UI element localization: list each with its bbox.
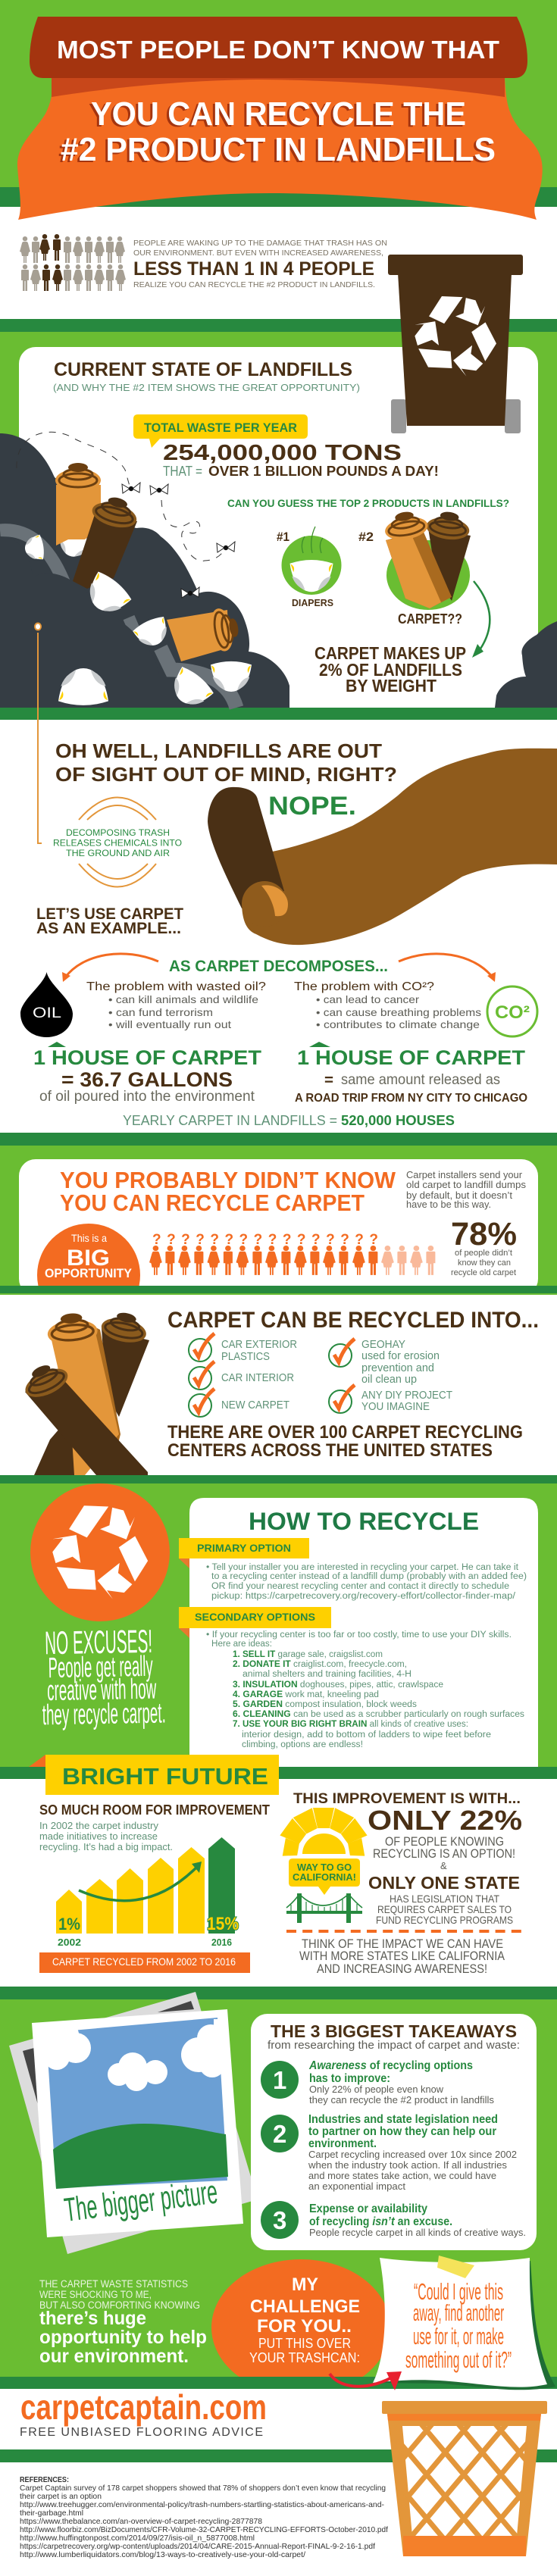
heading: from researching the impact of carpet and waste: <box>268 2040 520 2052</box>
awareness text block: OUR ENVIRONMENT. BUT EVEN WITH INCREASED AWARENESS, <box>133 249 383 258</box>
primary option text: to a recycling center instead of a landfill dump (probably with an added fee) <box>211 1572 527 1581</box>
secondary options list: interior design, add to bottom of ladders to wipe feet before <box>242 1730 491 1740</box>
top 2 products: CAN YOU GUESS THE TOP 2 PRODUCTS IN LANDFILLS? <box>227 497 509 509</box>
logo: carpetcaptain.com <box>20 2387 267 2439</box>
awareness text block: REALIZE YOU CAN RECYCLE THE #2 PRODUCT IN LANDFILLS. <box>133 280 375 289</box>
decomposing trash note <box>53 797 182 886</box>
references: http://www.lumberliquidators.com/blog/13-ways-to-creatively-use-your-old-carpet/ <box>20 2550 305 2559</box>
improvement stats: RECYCLING IS AN OPTION! <box>373 1846 515 1861</box>
bright future banner <box>29 1755 279 1795</box>
primary option text: • Tell your installer you are interested in recycling your carpet. He can take it <box>206 1563 519 1572</box>
check list: used for erosion <box>361 1349 440 1362</box>
wasted oil problems: • can fund terrorism <box>108 1006 213 1018</box>
no excuses note: NO EXCUSES! <box>45 1624 153 1662</box>
recycling centers statement <box>167 1422 523 1461</box>
total waste callout: THAT = <box>163 464 202 479</box>
current state of landfills heading: CURRENT STATE OF LANDFILLS <box>54 359 352 380</box>
title line 2: #2 PRODUCT IN LANDFILLS <box>61 131 496 168</box>
panel: you can recycle carpet <box>37 1171 526 1286</box>
total waste callout: TOTAL WASTE PER YEAR <box>144 420 297 435</box>
think of the impact: WITH MORE STATES LIKE CALIFORNIA <box>299 1949 505 1963</box>
carpet makes up 2 percent <box>314 643 466 696</box>
connector line <box>38 633 42 843</box>
decomposing trash note: RELEASES CHEMICALS INTO <box>53 838 182 849</box>
CO2 problems: • contributes to climate change <box>316 1018 480 1030</box>
as carpet decomposes, with arrows: AS CARPET DECOMPOSES... <box>169 957 388 975</box>
takeaway 2: 2 <box>273 2120 286 2148</box>
chart caption <box>39 1952 250 1973</box>
people pictogram: 78 percent: ???????????????? <box>152 1232 378 1248</box>
takeaway 1: has to improve: <box>309 2072 390 2085</box>
icon: diaper #1 <box>277 527 341 608</box>
think of the impact: AND INCREASING AWARENESS! <box>317 1962 487 1976</box>
total waste callout: OVER 1 BILLION POUNDS A DAY! <box>208 464 439 479</box>
total waste callout: 254,000,000 TONS <box>163 441 402 465</box>
room for improvement text: SO MUCH ROOM FOR IMPROVEMENT <box>39 1802 270 1818</box>
awareness text block: PEOPLE ARE WAKING UP TO THE DAMAGE THAT TRASH HAS ON <box>133 239 387 248</box>
illustration: crossed carpet rolls <box>18 1308 149 1475</box>
check list: ANY DIY PROJECT <box>361 1389 452 1402</box>
secondary options list: 4. GARAGE work mat, kneeling pad <box>233 1690 379 1699</box>
improvement stats <box>293 1791 522 1926</box>
takeaway 2: when the industry took action. If all industries <box>308 2159 507 2171</box>
challenge badge <box>211 2259 385 2377</box>
decomposing trash note: DECOMPOSING TRASH <box>66 827 170 838</box>
secondary options list: 1. SELL IT garage sale, craigslist.com <box>233 1650 383 1659</box>
stat: house equals road trip: A ROAD TRIP FROM NY CITY TO CHICAGO <box>295 1092 527 1105</box>
references: https://www.thebalance.com/an-overview-of-carpet-recycling-2877878 <box>20 2517 262 2526</box>
challenge badge: FOR YOU.. <box>257 2316 352 2337</box>
icon: orange recycle circle <box>30 1483 170 1621</box>
takeaway 3: People recycle carpet in all kinds of creative ways. <box>309 2227 526 2238</box>
takeaway 1: 1 <box>273 2066 286 2094</box>
references: http://www.huffingtonpost.com/2014/09/27/isis-oil_n_5877008.html <box>20 2534 255 2543</box>
wasted oil problems: • can kill animals and wildlife <box>108 993 258 1005</box>
references: http://www.treehugger.com/environmental-policy/trash-numbers-startling-statistics-about-americans-and- <box>20 2500 384 2509</box>
icon: CO2 circle: CO² <box>495 1002 530 1023</box>
stat: house equals gallons: of oil poured into the environment <box>39 1089 255 1105</box>
wasted oil problems: • will eventually run out <box>108 1018 231 1030</box>
primary option tab <box>179 1538 309 1568</box>
as carpet decomposes, with arrows <box>62 954 496 982</box>
current state of landfills heading: (AND WHY THE #2 ITEM SHOWS THE GREAT OPPORTUNITY) <box>53 383 360 393</box>
room for improvement text: made initiatives to increase <box>39 1830 158 1842</box>
icon: carpet #2: #2 <box>358 530 374 544</box>
illustration: polaroid photos <box>9 1992 258 2254</box>
takeaway 2: and more states take action, we could have <box>308 2170 496 2181</box>
title line 2: YOU CAN RECYCLE THE <box>89 97 464 134</box>
stat: house equals gallons: 1 HOUSE OF CARPET <box>33 1046 262 1069</box>
california callout: CALIFORNIA! <box>293 1871 356 1883</box>
no excuses note: People get really <box>48 1651 153 1684</box>
takeaway 1 <box>261 2059 495 2106</box>
stat: house equals gallons <box>33 1042 262 1105</box>
icon: oil drop <box>20 972 73 1037</box>
top 2 products <box>227 497 509 696</box>
arrow: challenge to note <box>330 2371 402 2390</box>
right trash mound <box>495 621 557 708</box>
CO2 problems: • can cause breathing problems <box>316 1006 481 1018</box>
secondary options tab: SECONDARY OPTIONS <box>195 1611 315 1623</box>
improvement stats: HAS LEGISLATION THAT <box>390 1893 499 1905</box>
references: https://carpetrecovery.org/wp-content/uploads/2014/04/CARE-2015-Annual-Report-FINAL-9-2-16-1.pdf <box>20 2542 375 2551</box>
no excuses note: creative with how <box>47 1674 157 1707</box>
california callout <box>289 1859 360 1895</box>
carpet makes up 2 percent: 2% OF LANDFILLS <box>319 660 462 680</box>
challenge badge: PUT THIS OVER <box>258 2336 351 2351</box>
check list: prevention and <box>361 1361 434 1374</box>
title line 2: YOU CAN RECYCLE THE <box>91 95 466 133</box>
improvement stats: ONLY 22% <box>368 1805 522 1836</box>
challenge badge: CHALLENGE <box>250 2296 360 2317</box>
check list: CAR EXTERIOR <box>221 1338 297 1351</box>
icon: wastebasket <box>382 2401 547 2556</box>
challenge badge: MY <box>292 2274 318 2295</box>
flies and flight path <box>17 432 235 598</box>
improvement stats: REQUIRES CARPET SALES TO <box>377 1903 512 1915</box>
wasted oil problems: The problem with wasted oil? <box>86 980 266 993</box>
bar labels <box>58 1914 239 1948</box>
photo caption: The bigger picture <box>62 2174 220 2229</box>
illustration: landfill mound <box>0 432 289 714</box>
panel: 3 biggest takeaways <box>251 2014 537 2250</box>
challenge badge: YOUR TRASHCAN: <box>249 2350 360 2365</box>
check list: PLASTICS <box>221 1350 270 1363</box>
improvement stats: THIS IMPROVEMENT IS WITH... <box>293 1791 521 1807</box>
statistics closing note: there’s huge <box>39 2308 146 2329</box>
check list <box>189 1333 452 1417</box>
icon: CO2 circle <box>487 986 537 1036</box>
check list: CAR INTERIOR <box>221 1371 294 1384</box>
wasted oil problems <box>86 980 266 1030</box>
awareness text block: LESS THAN 1 IN 4 PEOPLE <box>133 258 374 280</box>
bar labels: 2002 <box>58 1937 81 1948</box>
bar labels: 15% <box>207 1914 239 1934</box>
statistics closing note <box>39 2278 207 2367</box>
connector ring <box>35 623 41 630</box>
check list: oil clean up <box>361 1373 417 1386</box>
think of the impact <box>299 1937 505 1976</box>
check list: YOU IMAGINE <box>361 1400 430 1413</box>
no excuses note <box>41 1623 166 1731</box>
bar labels: 2016 <box>211 1937 232 1948</box>
decomposing trash note: THE GROUND AND AIR <box>66 848 170 858</box>
check list: NEW CARPET <box>221 1399 289 1411</box>
78 percent stat: recycle old carpet <box>451 1268 516 1277</box>
references: REFERENCES: <box>20 2475 69 2484</box>
78 percent stat <box>451 1216 517 1277</box>
people pictogram: 78 percent <box>149 1232 435 1275</box>
stat: house equals road trip <box>295 1042 527 1105</box>
bar labels: 1% <box>58 1915 80 1934</box>
bar chart: carpet recycled 2002 to 2016 <box>39 1837 250 1973</box>
takeaway 3: 3 <box>273 2206 286 2234</box>
takeaway 2: Carpet recycling increased over 10x since 2002 <box>308 2149 517 2160</box>
secondary options list <box>206 1630 524 1749</box>
takeaway 1: they can recycle the #2 product in landfills <box>309 2094 495 2106</box>
title line 2 <box>58 95 496 170</box>
statistics closing note: BUT ALSO COMFORTING KNOWING <box>39 2299 200 2311</box>
installers note: by default, but it doesn’t <box>406 1190 512 1201</box>
heading <box>60 1167 396 1216</box>
nope: NOPE. <box>268 792 356 821</box>
horizontal carpet roll <box>167 605 242 661</box>
recycling centers statement: CENTERS ACROSS THE UNITED STATES <box>167 1440 493 1461</box>
secondary options list: 6. CLEANING can be used as a scrubber particularly on rough surfaces <box>233 1710 524 1719</box>
stat: house equals road trip: 1 HOUSE OF CARPET <box>297 1046 526 1069</box>
primary option text: OR find your nearest recycling center and contact it directly to schedule <box>211 1582 509 1591</box>
heading: HOW TO RECYCLE <box>249 1508 479 1535</box>
secondary options list: • If your recycling center is too far or too costly, time to use your DIY skills. <box>206 1630 512 1640</box>
light carpet roll <box>55 463 101 546</box>
taped note <box>373 2256 555 2390</box>
recycling centers statement: THERE ARE OVER 100 CARPET RECYCLING <box>167 1422 523 1443</box>
big opportunity badge: This is a <box>71 1232 107 1244</box>
references: Carpet Captain survey of 178 carpet shoppers showed that 78% of shoppers don’t even know that recycling <box>20 2484 386 2493</box>
78 percent stat: 78% <box>451 1216 517 1252</box>
takeaway 2: to partner on how they can help our <box>308 2125 496 2138</box>
carpet makes up 2 percent: CARPET MAKES UP <box>314 643 466 663</box>
secondary options list: climbing, options are endless! <box>242 1740 363 1749</box>
icon: carpet #2: CARPET?? <box>398 611 462 627</box>
takeaway 3 <box>261 2201 526 2239</box>
logo: carpetcaptain.com: FREE UNBIASED FLOORING ADVICE <box>20 2426 263 2439</box>
arrow: carpet to 2 percent <box>472 581 490 658</box>
people pictogram: 1 in 4 <box>20 234 126 291</box>
references: their-garbage.html <box>20 2509 83 2518</box>
secondary options list: 2. DONATE IT craiglist.com, freecycle.com, <box>233 1660 407 1669</box>
icon: carpet #2 <box>358 508 471 627</box>
takeaway 2: environment. <box>308 2137 377 2150</box>
icon: golden gate bridge <box>286 1893 362 1923</box>
bright future banner: BRIGHT FUTURE <box>62 1763 268 1790</box>
installers note: Carpet installers send your <box>406 1169 523 1180</box>
california callout: WAY TO GO <box>297 1862 352 1873</box>
heading: YOU CAN RECYCLE CARPET <box>60 1190 365 1216</box>
room for improvement text: recycling. It’s had a big impact. <box>39 1841 173 1852</box>
diapers in front <box>58 569 252 714</box>
heading: out of sight <box>55 739 397 786</box>
icon: sun <box>280 1808 368 1859</box>
title banner <box>17 17 543 220</box>
CO2 problems <box>294 980 481 1030</box>
CO2 problems: • can lead to cancer <box>316 993 419 1005</box>
growth arrow <box>79 1862 202 1901</box>
stat: house equals road trip: same amount released as <box>341 1072 500 1088</box>
room for improvement text: In 2002 the carpet industry <box>39 1820 159 1831</box>
statistics closing note: THE CARPET WASTE STATISTICS <box>39 2278 188 2290</box>
takeaway 2 <box>261 2113 517 2192</box>
stat: house equals gallons: = 36.7 GALLONS <box>61 1068 233 1091</box>
takeaway 2: Industries and state legislation need <box>308 2113 498 2126</box>
takeaway 3: of recycling isn’t an excuse. <box>309 2215 452 2228</box>
carpet example heading: AS AN EXAMPLE... <box>36 920 181 937</box>
yearly carpet stat <box>123 1113 455 1128</box>
heading <box>268 2021 520 2052</box>
references <box>20 2475 388 2559</box>
chart caption: CARPET RECYCLED FROM 2002 TO 2016 <box>52 1955 236 1968</box>
diapers behind rolls <box>23 528 92 561</box>
references: their carpet is an option <box>20 2492 102 2501</box>
heading: YOU PROBABLY DIDN’T KNOW <box>60 1167 396 1193</box>
primary option text: pickup: https://carpetrecovery.org/recovery-effort/collector-finder-map/ <box>211 1592 516 1601</box>
illustration: unrolling carpet <box>208 749 557 945</box>
heading: out of sight: OH WELL, LANDFILLS ARE OUT <box>55 739 382 762</box>
takeaway 1: Awareness of recycling options <box>308 2059 473 2072</box>
improvement stats: & <box>440 1860 447 1871</box>
CO2 problems: The problem with CO²? <box>294 980 434 993</box>
panel: recycled into: CARPET CAN BE RECYCLED INTO... <box>167 1308 539 1333</box>
title line 2: #2 PRODUCT IN LANDFILLS <box>58 133 493 170</box>
primary option tab: PRIMARY OPTION <box>197 1542 291 1554</box>
carpet example heading: LET’S USE CARPET <box>36 905 183 923</box>
statistics closing note: our environment. <box>39 2346 189 2367</box>
big opportunity badge: OPPORTUNITY <box>45 1266 133 1280</box>
room for improvement text <box>39 1802 270 1852</box>
big opportunity badge: BIG <box>67 1246 110 1271</box>
78 percent stat: of people didn’t <box>455 1249 512 1258</box>
clouds <box>42 2019 225 2091</box>
title line 1: MOST PEOPLE DON’T KNOW THAT <box>57 36 499 64</box>
improvement stats: ONLY ONE STATE <box>368 1873 520 1893</box>
improvement stats: FUND RECYCLING PROGRAMS <box>376 1914 513 1926</box>
improvement stats: OF PEOPLE KNOWING <box>385 1834 504 1849</box>
heading: THE 3 BIGGEST TAKEAWAYS <box>271 2021 517 2041</box>
total waste callout <box>133 414 439 479</box>
statistics closing note: WERE SHOCKING TO ME, <box>39 2289 152 2300</box>
awareness text block <box>133 239 387 289</box>
panel: how to recycle <box>179 1498 538 1767</box>
installers note: have to be this way. <box>406 1199 491 1210</box>
quote <box>405 2278 512 2373</box>
check list: GEOHAY <box>361 1338 405 1351</box>
references: http://www.floorbiz.com/BizDocuments/CFR-Volume-32-CARPET-RECYCLING-EFFORTS-October-2010.pdf <box>20 2525 388 2534</box>
installers note <box>406 1169 526 1210</box>
secondary options list: 3. INSULATION doghouses, pipes, attic, crawlspace <box>233 1680 443 1690</box>
icon: oil drop: OIL <box>33 1005 61 1021</box>
think of the impact: THINK OF THE IMPACT WE CAN HAVE <box>302 1937 503 1951</box>
primary option text <box>206 1563 527 1601</box>
panel: recycled into <box>167 1308 539 1461</box>
icon: brown recycling bin <box>388 255 523 433</box>
icon: diaper #1: DIAPERS <box>292 597 333 608</box>
big opportunity badge <box>37 1224 140 1286</box>
installers note: old carpet to landfill dumps <box>406 1179 526 1190</box>
carpet example heading <box>36 905 183 937</box>
takeaway 1: Only 22% of people even know <box>309 2084 444 2095</box>
78 percent stat: know they can <box>458 1258 511 1268</box>
takeaway 3: Expense or availability <box>309 2202 427 2215</box>
secondary options list: 7. USE YOUR BIG RIGHT BRAIN all kinds of creative uses: <box>233 1720 468 1729</box>
statistics closing note: opportunity to help <box>39 2327 207 2348</box>
secondary options list: Here are ideas: <box>211 1640 272 1649</box>
grey landfill swirls <box>0 530 236 708</box>
secondary options list: 5. GARDEN compost insulation, block weeds <box>233 1700 417 1709</box>
heading: out of sight: OF SIGHT OUT OF MIND, RIGHT? <box>55 763 397 786</box>
stat: house equals road trip: = <box>324 1072 333 1089</box>
carpet makes up 2 percent: BY WEIGHT <box>346 676 437 696</box>
secondary options list: animal shelters and training facilities, 4-H <box>243 1670 411 1679</box>
yearly carpet stat: 520,000 HOUSES <box>341 1113 455 1128</box>
secondary options tab <box>179 1607 331 1638</box>
dark carpet roll <box>73 492 141 589</box>
yearly carpet stat: YEARLY CARPET IN LANDFILLS = <box>123 1113 337 1128</box>
current state of landfills heading <box>53 359 360 393</box>
icon: diaper #1: #1 <box>277 530 289 544</box>
takeaway 2: an exponential impact <box>308 2181 405 2192</box>
text: they recycle carpet. <box>42 1697 166 1731</box>
logo: carpetcaptain.com: carpetcaptain.com <box>20 2387 267 2427</box>
